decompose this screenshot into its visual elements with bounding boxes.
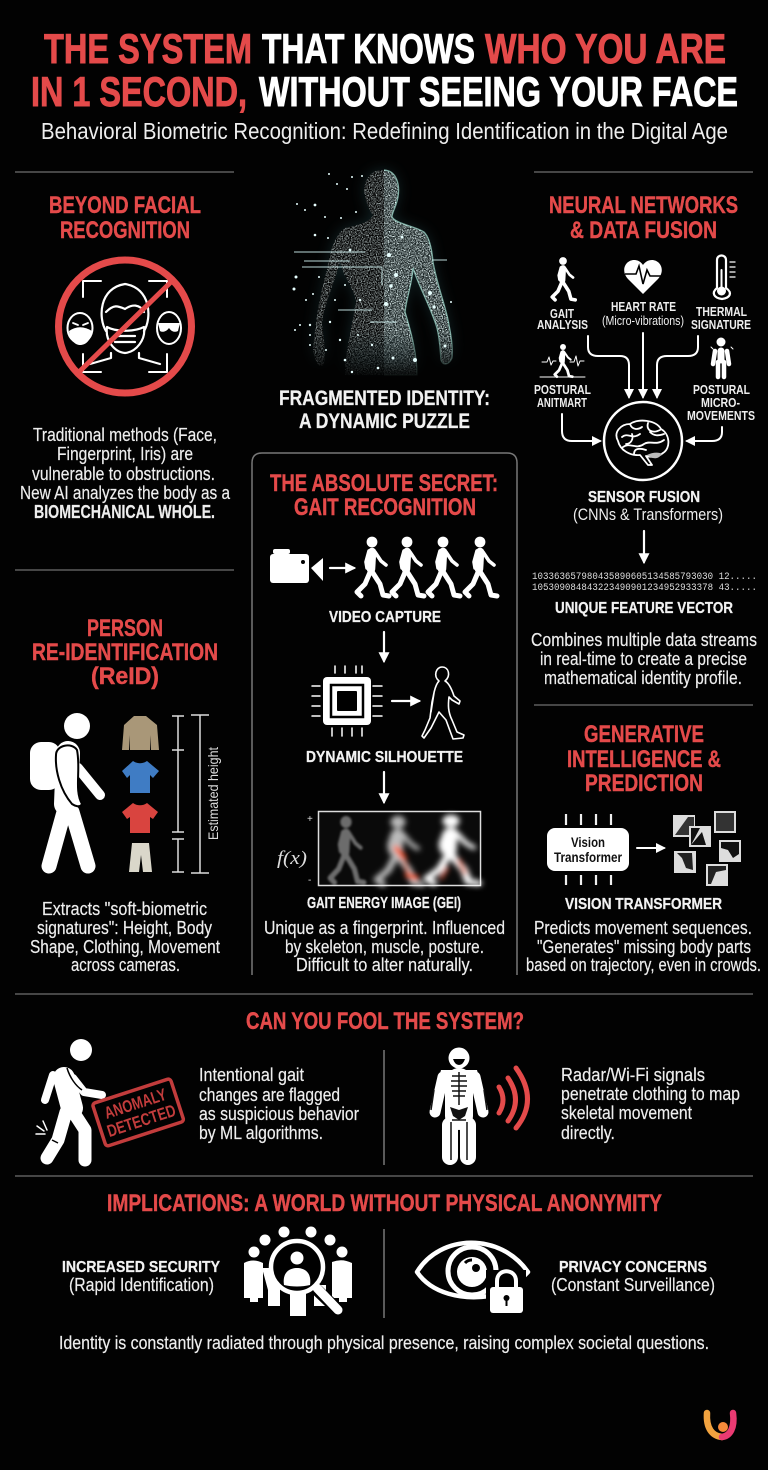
label: unique feature vector: UNIQUE FEATURE VECTOR — [555, 600, 733, 617]
text: combines data streams — [531, 630, 757, 688]
icon: vision transformer block — [547, 814, 629, 885]
heading: generative intelligence: GENERATIVE — [584, 721, 704, 748]
stamp: anomaly detected: ANOMALY — [102, 1085, 169, 1123]
panel: beyond facial recognition — [20, 192, 231, 522]
panel: neural networks and data fusion — [531, 192, 757, 688]
heading: beyond facial recognition: BEYOND FACIAL — [49, 192, 201, 219]
text: traditional methods — [20, 425, 231, 522]
text: radar signals: skeletal movement — [561, 1103, 692, 1123]
label: sensor fusion: SENSOR FUSION — [588, 489, 700, 506]
label: gait energy image: GAIT ENERGY IMAGE (GEI) — [307, 895, 461, 912]
title: IN 1 SECOND, — [31, 68, 247, 115]
labels: sensor inputs — [534, 299, 755, 423]
caption: fragmented identity: FRAGMENTED IDENTITY: — [279, 387, 490, 410]
stamp: anomaly detected — [92, 1078, 184, 1147]
arrow — [383, 772, 385, 802]
text: soft-biometric signatures: signatures": Height, Body — [37, 918, 212, 938]
caption: fragmented identity — [279, 387, 490, 433]
heading: person re-identification: RE-IDENTIFICATION — [32, 639, 218, 666]
label: increased security: (Rapid Identification) — [69, 1275, 214, 1295]
text: traditional methods: New AI analyzes the body as a — [20, 483, 231, 503]
labels: sensor inputs: THERMAL — [696, 304, 747, 319]
text: intentional gait: changes are flagged — [199, 1085, 340, 1105]
panel: can you fool the system — [36, 1008, 740, 1165]
label: increased security: INCREASED SECURITY — [62, 1259, 220, 1276]
arrow — [383, 632, 385, 661]
heading: neural networks: & DATA FUSION — [570, 217, 717, 244]
panel: generative intelligence — [526, 721, 761, 975]
icon: vision transformer block: Vision — [571, 834, 605, 850]
icon: skeleton scan — [431, 1048, 487, 1160]
arrows: inputs to brain — [562, 333, 722, 441]
icon: video camera — [270, 549, 323, 583]
label: privacy concerns: PRIVACY CONCERNS — [559, 1259, 707, 1276]
scale: estimated height — [172, 715, 221, 873]
arrow — [643, 531, 645, 562]
text: soft-biometric signatures: Extracts "soft-biometric — [42, 899, 207, 919]
icon: radar waves — [499, 1068, 528, 1128]
axis: f(x): - — [308, 875, 311, 886]
icon: clothing items — [122, 716, 159, 872]
caption: fragmented identity: A DYNAMIC PUZZLE — [299, 410, 470, 433]
icon: crowd under magnifier — [244, 1226, 352, 1316]
labels: sensor inputs: HEART RATE — [611, 299, 676, 314]
heading: gait recognition: THE ABSOLUTE SECRET: — [270, 470, 498, 497]
icon: dynamic silhouette outline — [422, 667, 464, 739]
text: traditional methods: vulnerable to obstructions. — [32, 464, 215, 484]
text: traditional methods: BIOMECHANICAL WHOLE. — [34, 502, 215, 522]
heading: gait recognition — [270, 470, 498, 521]
icon: gait walker — [552, 257, 575, 300]
labels: sensor inputs: (Micro-vibrations) — [602, 313, 684, 328]
labels: sensor inputs: GAIT — [550, 306, 574, 321]
icon: person with backpack — [30, 713, 100, 866]
text: intentional gait — [199, 1065, 359, 1143]
axis: f(x) — [277, 814, 313, 886]
text: intentional gait: Intentional gait — [199, 1065, 304, 1085]
heading: person re-identification: PERSON — [87, 615, 163, 642]
label: sensor fusion: (CNNs & Transformers) — [573, 505, 723, 524]
text: radar signals — [561, 1065, 740, 1143]
heading: beyond facial recognition: RECOGNITION — [60, 217, 190, 244]
icon: vision transformer block: Transformer — [554, 849, 622, 865]
text: traditional methods: Traditional methods (Face, — [33, 425, 217, 445]
heading: person re-identification — [32, 615, 218, 690]
figure: fragmented digital human body — [292, 170, 452, 375]
axis: f(x): f(x) — [277, 848, 307, 869]
text: gait uniqueness: by skeleton, muscle, posture. — [285, 937, 484, 957]
heading: generative intelligence: INTELLIGENCE & — [567, 746, 721, 773]
text: radar signals: penetrate clothing to map — [561, 1084, 740, 1104]
label: dynamic silhouette: DYNAMIC SILHOUETTE — [306, 749, 463, 766]
text: radar signals: Radar/Wi-Fi signals — [561, 1065, 705, 1085]
text: intentional gait: by ML algorithms. — [199, 1123, 323, 1143]
text: gait uniqueness — [264, 918, 505, 975]
title — [31, 25, 738, 115]
icons: walking figures — [357, 537, 497, 596]
icon: postural animation — [540, 344, 585, 377]
text: radar signals: directly. — [561, 1123, 615, 1143]
heading: person re-identification: (ReID) — [91, 663, 159, 690]
text: soft-biometric signatures: across cameras. — [71, 955, 180, 975]
scale: estimated height: Estimated height — [205, 747, 221, 840]
icon: thermometer — [714, 256, 735, 299]
label: increased security — [62, 1259, 220, 1295]
icon: face scan prohibited — [58, 260, 192, 393]
labels: sensor inputs: ANALYSIS — [537, 317, 588, 332]
title: THAT KNOWS — [262, 25, 475, 72]
labels: sensor inputs: SIGNATURE — [691, 317, 751, 332]
stamp: anomaly detected: DETECTED — [105, 1101, 178, 1141]
panel: implications — [59, 1190, 715, 1353]
heading: generative intelligence: PREDICTION — [585, 770, 703, 797]
icon: brain in circle — [604, 402, 682, 480]
label: privacy concerns: (Constant Surveillance) — [551, 1275, 715, 1295]
text: gait uniqueness: Difficult to alter naturally. — [296, 955, 473, 975]
heading: neural networks — [549, 192, 738, 244]
chart: gait energy image — [318, 812, 480, 886]
title: THE SYSTEM — [44, 25, 252, 72]
panel: person re-identification — [30, 615, 221, 975]
text: predicts movement — [526, 918, 761, 975]
heading: generative intelligence — [567, 721, 721, 797]
labels: sensor inputs: POSTURAL — [534, 382, 591, 397]
label: sensor fusion — [573, 489, 723, 524]
label: privacy concerns — [551, 1259, 715, 1295]
label: vision transformer: VISION TRANSFORMER — [565, 896, 722, 913]
text: traditional methods: Fingerprint, Iris) are — [57, 444, 193, 464]
labels: sensor inputs: MICRO- — [701, 395, 740, 410]
text: combines data streams: mathematical identity profile. — [544, 668, 742, 688]
icon: eye with padlock — [417, 1243, 528, 1316]
heading: can you fool the system: CAN YOU FOOL THE SYSTEM? — [246, 1008, 524, 1035]
text: soft-biometric signatures: Shape, Clothing, Movement — [30, 937, 220, 957]
panel: gait recognition — [252, 453, 517, 975]
heading: gait recognition: GAIT RECOGNITION — [294, 494, 476, 521]
icon: processor chip — [312, 666, 382, 736]
text: gait uniqueness: Unique as a fingerprint. Influenced — [264, 918, 505, 938]
icon: micro-movements figure — [711, 338, 733, 377]
labels: sensor inputs: POSTURAL — [693, 382, 750, 397]
image patches — [673, 811, 741, 886]
arrow — [637, 847, 664, 849]
labels: sensor inputs: ANITMART — [537, 395, 587, 410]
heading: beyond facial recognition — [49, 192, 201, 244]
arrow — [392, 700, 419, 702]
icon: heart rate — [624, 260, 662, 294]
text: intentional gait: as suspicious behavior — [199, 1104, 359, 1124]
icon: logo — [707, 1413, 733, 1437]
text: soft-biometric signatures — [30, 899, 220, 975]
feature vector digits — [532, 572, 757, 594]
icon: limping person — [36, 1039, 102, 1160]
axis: f(x): + — [307, 814, 313, 825]
arrow — [330, 567, 354, 569]
label: video capture: VIDEO CAPTURE — [329, 609, 441, 626]
